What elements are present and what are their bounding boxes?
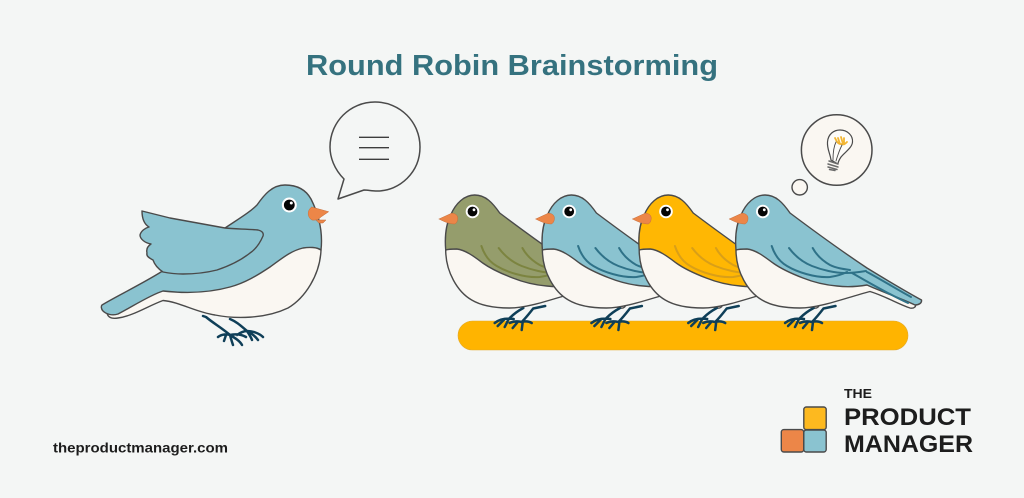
bird: yellow bird — [632, 195, 825, 330]
logo icon squares — [781, 407, 826, 452]
website url: theproductmanager.com — [53, 440, 228, 456]
thought bubble with light bulb — [792, 115, 872, 195]
bird: blue bird in line — [536, 195, 728, 330]
logo wordmark — [844, 387, 973, 458]
logo wordmark: MANAGER — [844, 431, 973, 458]
logo: The Product Manager — [781, 387, 973, 458]
bird: olive bird — [439, 195, 631, 330]
title: Round Robin Brainstorming — [306, 50, 718, 82]
logo wordmark: PRODUCT — [844, 404, 971, 431]
speech bubble — [330, 102, 420, 199]
bird: speaking blue bird — [101, 185, 329, 345]
bird: thinking blue bird — [729, 195, 922, 330]
icon: light bulb — [827, 130, 853, 170]
logo wordmark: THE — [844, 387, 872, 401]
perch — [458, 321, 908, 350]
